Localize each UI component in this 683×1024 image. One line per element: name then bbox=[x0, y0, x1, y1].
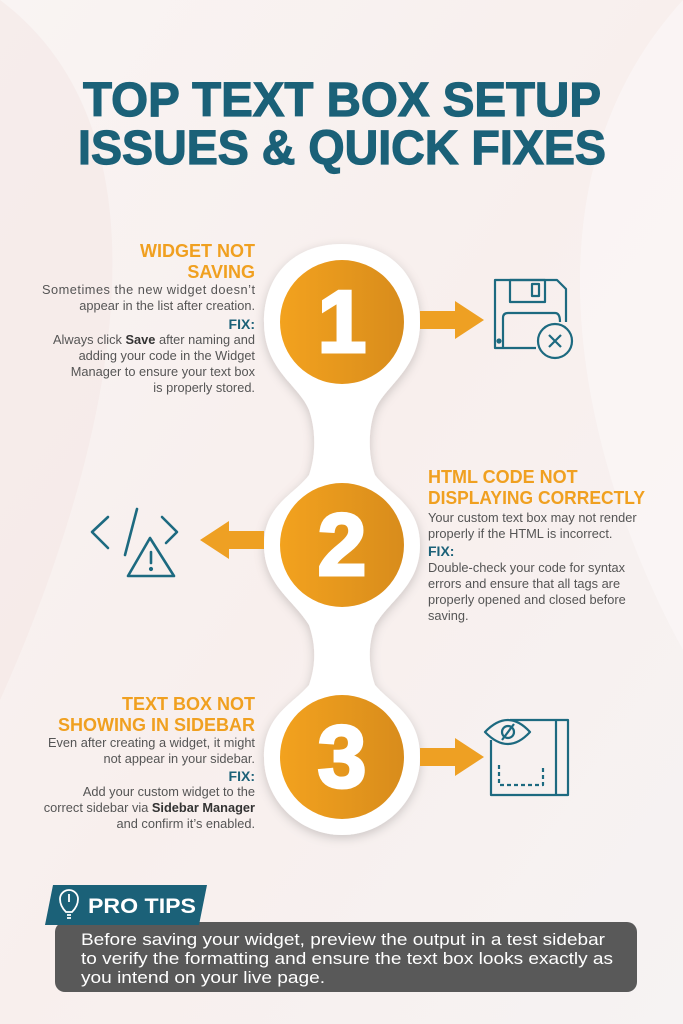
step 2 circle bbox=[280, 483, 404, 607]
text block 3: FIX: bbox=[229, 768, 255, 784]
text block 1: SAVING bbox=[187, 262, 255, 282]
text block 1: Always click Save after naming and bbox=[53, 332, 255, 347]
icon: sidebar with hidden eye bbox=[485, 720, 568, 795]
title: TOP TEXT BOX SETUP bbox=[83, 74, 601, 127]
text block 1: Sometimes the new widget doesn’t bbox=[42, 282, 255, 297]
text block 3: SHOWING IN SIDEBAR bbox=[58, 715, 255, 735]
text block 3: and confirm it’s enabled. bbox=[117, 816, 255, 831]
text block 3: not appear in your sidebar. bbox=[103, 751, 255, 766]
text block 2: DISPLAYING CORRECTLY bbox=[428, 488, 645, 508]
text block 1: appear in the list after creation. bbox=[79, 298, 255, 313]
step 2 circle: 2 bbox=[318, 495, 366, 594]
text block 2: HTML CODE NOT bbox=[428, 467, 578, 487]
pro tips box: Before saving your widget, preview the output in a test sidebar bbox=[81, 930, 605, 949]
pro tips box: to verify the formatting and ensure the text box looks exactly as bbox=[81, 949, 613, 968]
text block 3: Even after creating a widget, it might bbox=[48, 735, 255, 750]
text block 2: Your custom text box may not render bbox=[428, 510, 637, 525]
text block 2: FIX: bbox=[428, 543, 454, 559]
icon: floppy disk with x bbox=[495, 280, 572, 358]
text block 3: TEXT BOX NOT bbox=[122, 694, 255, 714]
pro tips tag bbox=[45, 885, 207, 925]
pro tips box: you intend on your live page. bbox=[81, 968, 325, 987]
step 1 circle: 1 bbox=[318, 272, 366, 371]
text block 1: adding your code in the Widget bbox=[79, 348, 255, 363]
text block 3: Add your custom widget to the bbox=[83, 784, 255, 799]
text block 2: properly opened and closed before bbox=[428, 592, 626, 607]
step 3 circle bbox=[280, 695, 404, 819]
text block 3 bbox=[44, 694, 255, 831]
text block 2 bbox=[428, 467, 645, 623]
text block 2: Double-check your code for syntax bbox=[428, 560, 626, 575]
title bbox=[78, 74, 606, 175]
arrow 3 bbox=[420, 738, 484, 776]
arrow 2 bbox=[200, 521, 264, 559]
arrow 1 bbox=[420, 301, 484, 339]
text block 1: Manager to ensure your text box bbox=[71, 364, 256, 379]
text block 1: is properly stored. bbox=[153, 380, 255, 395]
text block 2: saving. bbox=[428, 608, 469, 623]
text block 1: WIDGET NOT bbox=[140, 241, 255, 261]
title: ISSUES & QUICK FIXES bbox=[78, 122, 606, 175]
step 3 circle: 3 bbox=[318, 707, 366, 806]
text block 2: properly if the HTML is incorrect. bbox=[428, 526, 612, 541]
icon: code with warning bbox=[92, 509, 177, 576]
text block 3: correct sidebar via Sidebar Manager bbox=[44, 800, 255, 815]
text block 1 bbox=[42, 241, 256, 395]
backbone: white connectors and circles bbox=[264, 244, 420, 835]
step 1 circle bbox=[280, 260, 404, 384]
pro tips tag: PRO TIPS bbox=[88, 895, 196, 918]
text block 2: errors and ensure that all tags are bbox=[428, 576, 620, 591]
pro tips box bbox=[55, 922, 637, 992]
text block 1: FIX: bbox=[229, 316, 255, 332]
